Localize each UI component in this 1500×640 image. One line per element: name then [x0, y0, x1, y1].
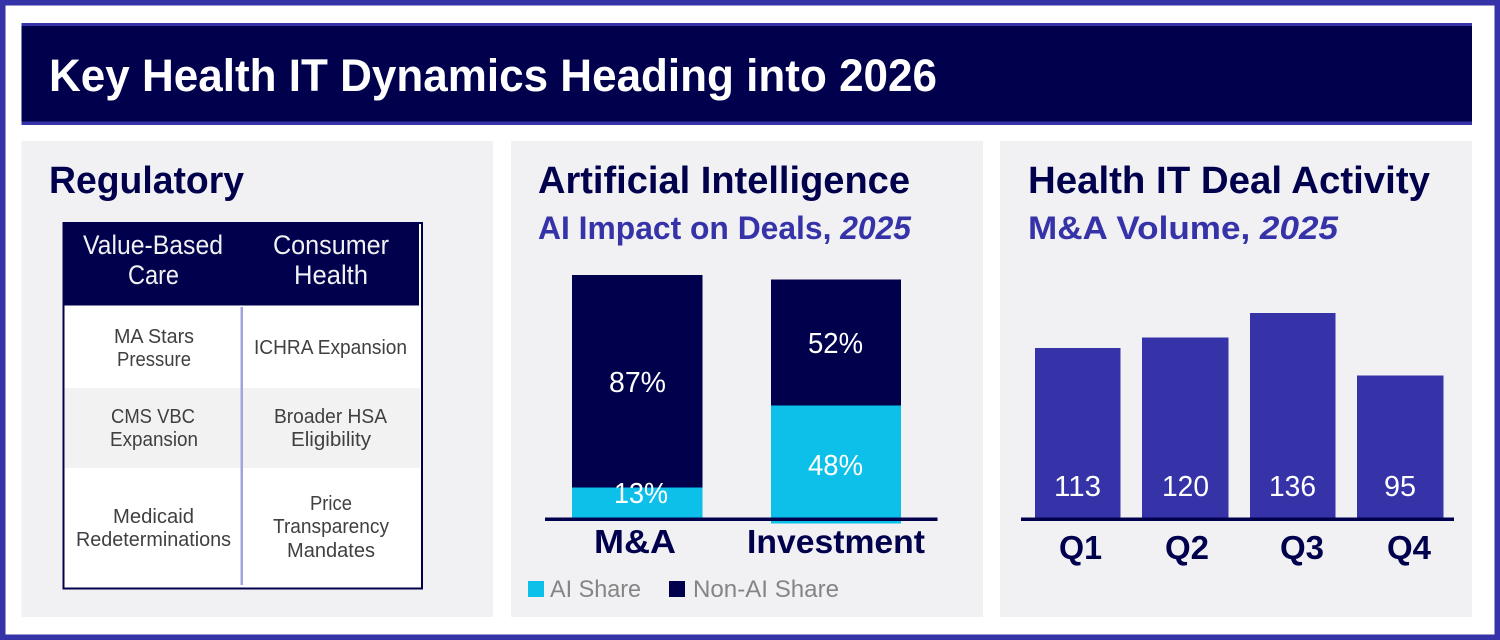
- row: MA Stars Pressure and ICHRA Expansion: ICHRA Expansion: [254, 337, 407, 359]
- heading: regulatory: Regulatory: [49, 160, 244, 202]
- row: MA Stars Pressure and ICHRA Expansion: MA Stars: [114, 326, 194, 348]
- heading: artificial intelligence: Artificial Intelligence: [538, 160, 910, 202]
- title banner: [22, 23, 1472, 125]
- row: Medicaid Redeterminations and Price Transparency Mandates: Price: [310, 493, 352, 515]
- row: Medicaid Redeterminations and Price Transparency Mandates: Transparency: [273, 516, 389, 538]
- bar chart: M&A volume by quarter: 113: [1054, 471, 1101, 503]
- axis label: investment: Investment: [747, 523, 925, 560]
- legend: Non-AI Share: [693, 576, 839, 603]
- title: Key Health IT Dynamics Heading into 2026: [49, 50, 937, 101]
- table header: Value-Based: [83, 230, 223, 260]
- bar chart: M&A volume by quarter: Q3: [1280, 529, 1324, 566]
- chart axis: [545, 518, 938, 521]
- column divider: [240, 307, 243, 585]
- legend: [528, 576, 839, 603]
- stacked bar: M&A: 87%: [609, 367, 666, 399]
- row: Medicaid Redeterminations and Price Transparency Mandates: [76, 493, 389, 562]
- table header: [64, 224, 419, 306]
- subheading: AI impact on deals: AI Impact on Deals, 2025: [538, 210, 912, 246]
- table header: Health: [294, 260, 368, 290]
- row: MA Stars Pressure and ICHRA Expansion: [114, 326, 407, 371]
- axis label: M&A: M&A: [594, 523, 676, 560]
- panel: regulatory: [22, 141, 493, 617]
- stacked bar: investment: [771, 280, 901, 524]
- shaded table row: [65, 388, 420, 468]
- legend: AI Share: [550, 576, 641, 603]
- table header: Care: [128, 260, 179, 290]
- bar chart: M&A volume by quarter: [1021, 313, 1454, 566]
- row: MA Stars Pressure and ICHRA Expansion: Pressure: [117, 349, 191, 371]
- subheading: M&A volume: M&A Volume, 2025: [1028, 210, 1339, 246]
- row: Medicaid Redeterminations and Price Transparency Mandates: Redeterminations: [76, 529, 231, 551]
- row: CMS VBC Expansion and Broader HSA Eligibility: Broader HSA: [274, 406, 388, 428]
- row: CMS VBC Expansion and Broader HSA Eligibility: [110, 406, 388, 451]
- regulatory table: [64, 223, 422, 588]
- bar chart: M&A volume by quarter: Q4: [1387, 529, 1432, 566]
- bar chart: M&A volume by quarter: 95: [1384, 471, 1416, 503]
- stacked bar: M&A: 13%: [614, 478, 668, 510]
- stacked bar: M&A: [572, 275, 702, 518]
- bar chart: M&A volume by quarter: Q1: [1059, 529, 1102, 566]
- heading: health IT deal activity: Health IT Deal Activity: [1028, 160, 1430, 202]
- panel: health IT deal activity: [1000, 141, 1472, 617]
- row: CMS VBC Expansion and Broader HSA Eligibility: CMS VBC: [111, 406, 195, 428]
- table header: Consumer: [273, 230, 389, 260]
- bar chart: M&A volume by quarter: Q2: [1165, 529, 1209, 566]
- row: CMS VBC Expansion and Broader HSA Eligibility: Expansion: [110, 429, 198, 451]
- bar chart: M&A volume by quarter: 136: [1269, 471, 1316, 503]
- row: Medicaid Redeterminations and Price Transparency Mandates: Mandates: [287, 540, 375, 562]
- bar chart: M&A volume by quarter: 120: [1162, 471, 1209, 503]
- row: CMS VBC Expansion and Broader HSA Eligibility: Eligibility: [291, 429, 371, 451]
- panel: artificial intelligence: [511, 141, 983, 617]
- stacked bar: investment: 48%: [808, 450, 863, 482]
- row: Medicaid Redeterminations and Price Transparency Mandates: Medicaid: [113, 506, 194, 528]
- stacked bar: investment: 52%: [808, 328, 863, 360]
